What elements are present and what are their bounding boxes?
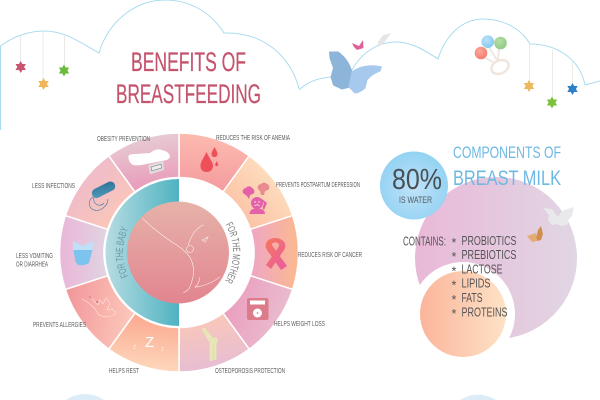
icon: sleep z letters: Z [161,347,164,353]
labels: wheel benefits: LESS VOMITING [16,251,53,260]
rattle [475,35,511,77]
labels: wheel benefits: HELPS REST [109,366,139,375]
segment: helps rest [109,313,179,372]
labels: wheel benefits: REDUCES RISK OF CANCER [298,250,362,259]
contains list: * [452,264,456,278]
segment: helps weight loss [223,276,293,349]
labels: wheel benefits [16,133,362,375]
labels: wheel benefits: PREVENTS ALLERGIES [33,320,86,329]
water circle: 80% [392,164,442,196]
icon: sleep z letters [133,334,164,353]
segment: obesity prevention [109,133,179,192]
white ring cut-out [411,262,515,366]
for the mother ring [179,178,254,328]
heading: BREAST MILK [453,167,561,190]
icon: sleep z letters: Z [133,345,136,351]
labels: wheel benefits: PREVENTS POSTPARTUM DEPRESSION [276,180,360,189]
contains list: PROBIOTICS [462,234,516,248]
heading: COMPONENTS OF [453,144,561,162]
for the baby ring [105,179,179,326]
bottom pale circles [66,394,496,400]
cloud outline [0,0,600,130]
title: BREASTFEEDING [116,79,261,109]
contains list: * [452,307,456,321]
icon: stressed woman with clouds [243,183,269,214]
right hanging stars [524,45,578,108]
segment: osteoporosis protection [179,313,249,372]
segment: prevents allergies [65,276,135,349]
labels: wheel benefits: REDUCES THE RISK OF ANEMIA [216,133,291,142]
mother and baby line drawing [143,218,220,293]
labels: wheel benefits: OBESITY PREVENTION [97,134,150,143]
icon: baby scale [128,149,170,174]
icon: allergic hand sketch [82,296,116,317]
icon: sleep z letters: Z [145,334,154,351]
contains list: * [452,250,456,264]
white butterfly [543,207,574,226]
contains list: * [452,236,456,250]
pink circle [415,177,577,339]
title: BENEFITS OF [131,47,246,77]
left hanging stars [16,32,69,90]
contains list: LACTOSE [462,262,502,276]
contains list: FATS [462,291,482,305]
segment: reduces the risk of anemia [179,133,249,192]
contains list: LIPIDS [462,277,490,291]
for the baby label [123,229,128,276]
labels: wheel benefits: LESS INFECTIONS [32,181,75,190]
central mother and baby circle [127,202,229,304]
contains list: * [452,278,456,292]
heading [453,144,561,190]
segment: prevents postpartum depression [223,156,293,229]
contains list: PREBIOTICS [462,248,516,262]
title [116,47,261,109]
peach circle [420,271,506,357]
contains list: PROTEINS [462,305,508,319]
white divider [178,177,180,328]
icon: blue onesie [73,241,93,265]
orange butterfly [527,226,543,242]
contains list: * [452,293,456,307]
labels: wheel benefits: HELPS WEIGHT LOSS [274,319,325,328]
segment: less vomiting or diarrhea [60,216,108,289]
panel: components of breast milk [380,144,577,366]
for the mother text: FOR THE MOTHER [225,222,240,284]
icon: awareness ribbon [266,238,287,270]
icon: blood drops [200,147,218,172]
labels: wheel benefits: OR DIARRHEA [16,260,49,269]
segment: less infections [65,156,135,229]
butterflies top [330,33,391,93]
icon: weighing scale [247,298,268,320]
for the mother label path [225,225,233,280]
water circle [380,152,448,220]
contains list [403,234,516,321]
water circle: IS WATER [399,195,432,206]
for the baby text: FOR THE BABY [116,226,128,278]
labels: wheel benefits: OSTEOPOROSIS PROTECTION [215,366,285,375]
icon: bacterium [89,180,117,210]
contains list: CONTAINS: [403,234,446,248]
icon: knee bones [202,328,218,361]
segment: reduces risk of cancer [250,216,298,289]
benefits wheel [16,133,362,375]
